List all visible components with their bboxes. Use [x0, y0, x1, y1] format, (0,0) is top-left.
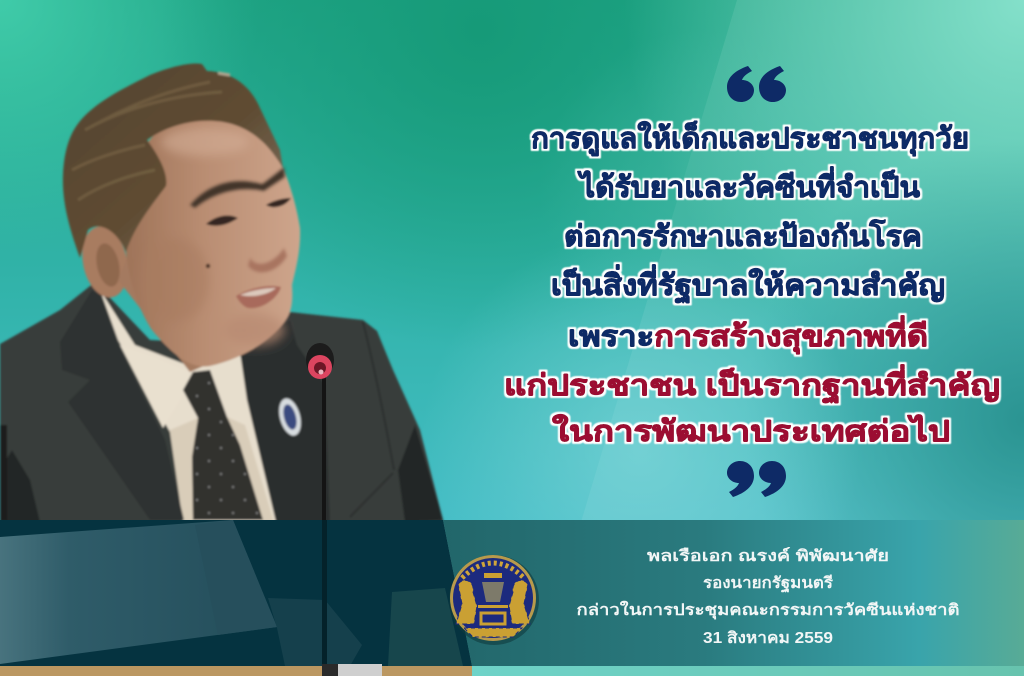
attribution text: พลเรือเอก ณรงค์ พิพัฒนาศัย	[647, 547, 889, 565]
necktie	[183, 370, 263, 520]
microphone	[306, 343, 334, 666]
closing quotation mark	[727, 461, 786, 497]
attribution text	[576, 547, 960, 647]
face	[125, 118, 300, 367]
eyebrows	[190, 167, 285, 208]
hand	[268, 598, 362, 666]
cheek shading	[141, 238, 209, 322]
attribution text: รองนายกรัฐมนตรี	[703, 574, 834, 593]
object at left edge	[0, 425, 7, 520]
bottom strip	[0, 664, 1024, 676]
portrait of speaker	[0, 64, 472, 666]
government seal	[449, 555, 539, 645]
quotation text: เพราะ การสร้างสุขภาพที่ดี	[568, 315, 928, 354]
eyes	[206, 198, 291, 226]
central bowl	[478, 573, 508, 624]
podium	[388, 588, 463, 666]
mouth	[236, 286, 281, 308]
opening quotation mark	[727, 66, 786, 102]
quotation text: ในการพัฒนาประเทศต่อไป	[552, 414, 950, 448]
quotation text	[504, 120, 1000, 448]
caption band over portrait	[0, 520, 472, 666]
quotation text: การดูแลให้เด็กและประชาชนทุกวัย	[531, 120, 969, 156]
hair streaks	[72, 82, 222, 200]
ear	[76, 222, 134, 302]
attribution text: 31 สิงหาคม 2559	[703, 629, 833, 647]
bottom ornament	[464, 628, 522, 637]
left lapel	[60, 290, 184, 520]
head	[63, 64, 300, 372]
neck	[118, 250, 240, 372]
jacket	[0, 282, 472, 666]
quotation text: ได้รับยาและวัคซีนที่จำเป็น	[577, 166, 920, 204]
lions	[456, 580, 477, 624]
quotation text: ต่อการรักษาและป้องกันโรค	[564, 218, 922, 253]
caption band right side	[443, 520, 1024, 666]
attribution text: กล่าวในการประชุมคณะกรรมการวัคซีนแห่งชาติ	[576, 600, 960, 620]
mole	[206, 264, 210, 268]
quotation text: แก่ประชาชน เป็นรากฐานที่สำคัญ	[504, 364, 1000, 404]
lapel pin	[275, 396, 305, 438]
shirt	[100, 290, 276, 522]
right lapel	[240, 320, 330, 522]
jacket shading	[0, 425, 443, 522]
quotation text: เป็นสิ่งที่รัฐบาลให้ความสำคัญ	[551, 264, 945, 304]
nose	[248, 248, 287, 272]
top ornament	[462, 563, 524, 578]
collar shadow	[120, 345, 190, 428]
hair	[63, 64, 283, 258]
forehead highlight	[161, 128, 249, 156]
name plate	[0, 520, 277, 664]
